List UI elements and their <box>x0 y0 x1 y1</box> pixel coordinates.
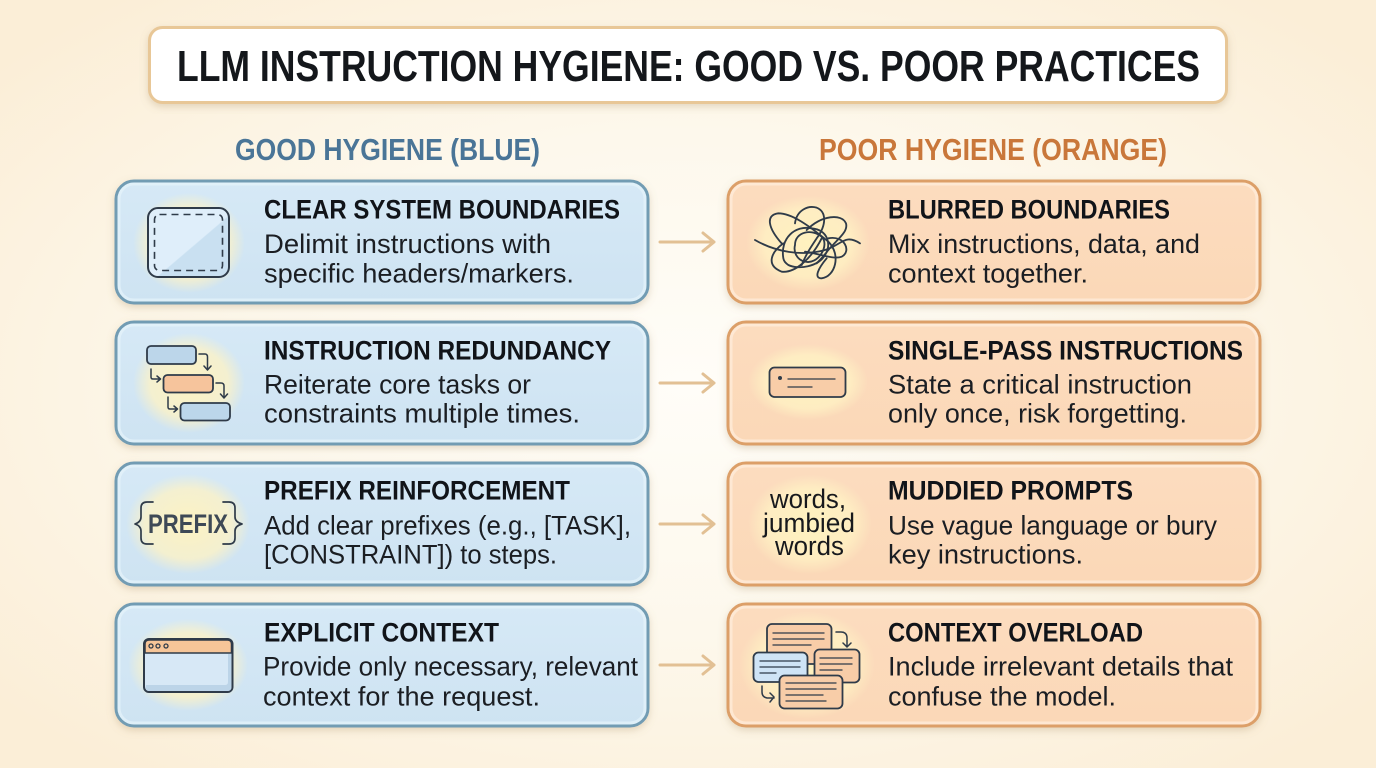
heading: PREFIX REINFORCEMENT <box>264 476 570 506</box>
description: Include irrelevant details that <box>888 652 1233 682</box>
heading: BLURRED BOUNDARIES <box>888 194 1170 224</box>
icon: jumbled words: jumbied <box>762 508 855 538</box>
panel: single-pass instructions <box>728 322 1260 444</box>
description <box>264 370 580 428</box>
arrow: row 2 <box>660 374 714 392</box>
description: only once, risk forgetting. <box>888 398 1187 428</box>
description: key instructions. <box>888 540 1083 570</box>
description: confuse the model. <box>888 682 1116 712</box>
description <box>263 652 638 712</box>
icon: dashed boundary box <box>133 193 245 293</box>
description: Reiterate core tasks or <box>264 370 531 400</box>
arrow: row 4 <box>660 656 714 674</box>
description: Use vague language or bury <box>888 510 1217 540</box>
heading: MUDDIED PROMPTS <box>888 476 1133 506</box>
panel: instruction redundancy <box>116 322 648 444</box>
title <box>150 28 1226 102</box>
panel: prefix reinforcement <box>116 463 648 585</box>
arrow: row 1 <box>660 233 714 251</box>
panel: context overload <box>728 604 1260 726</box>
panel: explicit context <box>116 604 648 726</box>
panel: muddied prompts <box>728 463 1260 585</box>
description: specific headers/markers. <box>264 258 574 288</box>
description: Delimit instructions with <box>264 229 551 259</box>
heading: CONTEXT OVERLOAD <box>888 618 1143 648</box>
heading: poor hygiene: POOR HYGIENE (ORANGE) <box>819 132 1167 167</box>
description: constraints multiple times. <box>264 398 580 428</box>
icon: jumbled words: words <box>774 531 844 561</box>
icon: tangled line <box>746 195 870 291</box>
icon: prefix in braces: PREFIX <box>148 509 228 539</box>
description: [CONSTRAINT]) to steps. <box>264 540 557 570</box>
description <box>888 370 1192 428</box>
description: Mix instructions, data, and <box>888 229 1200 259</box>
description: context for the request. <box>263 682 540 712</box>
heading: good hygiene: GOOD HYGIENE (BLUE) <box>235 132 540 167</box>
description <box>888 510 1217 570</box>
description: Provide only necessary, relevant <box>263 652 638 682</box>
description: State a critical instruction <box>888 370 1192 400</box>
icon: repeated steps <box>133 333 245 433</box>
icon: browser window <box>128 619 248 711</box>
description: Add clear prefixes (e.g., [TASK], <box>264 510 631 540</box>
description <box>888 229 1200 288</box>
icon: prefix in braces <box>126 474 250 574</box>
description: context together. <box>888 258 1088 288</box>
panel: clear system boundaries <box>116 181 648 303</box>
icon: single instruction bar <box>748 344 868 420</box>
icon: jumbled words: words, <box>769 484 846 514</box>
heading: INSTRUCTION REDUNDANCY <box>264 336 611 366</box>
heading: CLEAR SYSTEM BOUNDARIES <box>264 194 620 224</box>
heading: EXPLICIT CONTEXT <box>264 618 499 648</box>
icon: jumbled words <box>748 474 872 574</box>
description <box>264 510 631 570</box>
description <box>888 652 1233 712</box>
description <box>264 229 574 288</box>
arrow: row 3 <box>660 515 714 533</box>
icon: overlapping documents <box>739 611 875 719</box>
panel: blurred boundaries <box>728 181 1260 303</box>
heading: SINGLE-PASS INSTRUCTIONS <box>888 336 1243 366</box>
